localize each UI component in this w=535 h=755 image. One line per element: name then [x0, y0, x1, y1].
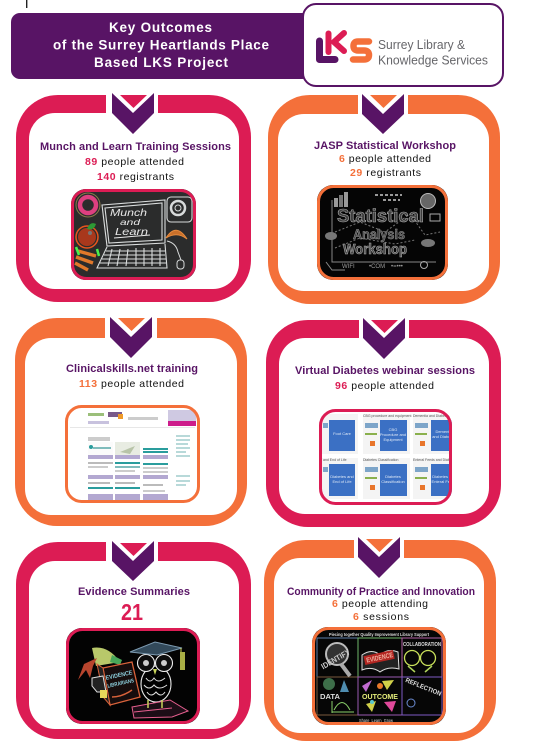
image: statistical workshop chalkboard: [317, 185, 448, 280]
image: statistical workshop chalkboard: •COM: [369, 264, 385, 270]
image: webinar tile grid: Equipment: [383, 437, 403, 442]
title: Key Outcomes: [109, 20, 212, 35]
image: statistical workshop chalkboard: WIFI: [342, 264, 355, 270]
icon: chevron: [112, 541, 154, 581]
logo panel: [303, 4, 503, 86]
heading: Evidence Summaries: [78, 586, 190, 598]
image: webinar tile grid: and End of Life: [323, 458, 347, 462]
image: webinar tile grid: End of Life: [332, 479, 352, 484]
attendance: 96 people attended: [335, 380, 434, 392]
image: statistical workshop chalkboard: Analysis: [353, 226, 405, 242]
image: community of practice chalk puzzle: IDENTIFY: [320, 647, 352, 671]
image: webinar tile grid: Enteral Feeds and Diabetes: [413, 458, 457, 462]
heading: JASP Statistical Workshop: [314, 140, 456, 152]
image: munch and learn chalkboard: Munch: [110, 208, 148, 219]
image: statistical workshop chalkboard: •=•••: [391, 264, 403, 270]
header banner: [11, 13, 311, 79]
panel: Munch and Learn: [16, 90, 251, 302]
image: webinar tile grid: Procedure and: [380, 432, 406, 437]
image: evidence librarians owl chalkboard: LIBRARIANS: [107, 678, 135, 690]
logo text: [378, 38, 488, 68]
image: munch and learn chalkboard: Learn: [115, 227, 149, 238]
image: community of practice chalk puzzle: COLLABORATION: [403, 642, 441, 648]
image: munch and learn chalkboard: and: [120, 218, 141, 227]
laptop: [97, 200, 167, 268]
registrants: 29 registrants: [350, 167, 421, 179]
image: webinar tile grid: and Diabetes: [432, 434, 456, 439]
attendance: 89 people attended: [85, 156, 184, 168]
image: webinar tile grid: Diabetes: [385, 474, 401, 479]
image: webinar tile grid: Dementia: [435, 429, 453, 434]
attendance: 6 people attended: [339, 153, 431, 165]
logo text: Surrey Library &: [378, 38, 466, 52]
image: webinar tile grid: CBG procedure and equipment: [363, 414, 411, 418]
image: community of practice chalk puzzle: OUTCOME: [362, 694, 398, 701]
panel: Community of Practice and Innovation: [264, 533, 496, 741]
icon: chevron: [112, 93, 154, 134]
image: webinar tile grid: Diabetes Classification: [363, 458, 398, 462]
image: webinar tile grid: Dementia and Diabetes: [413, 414, 450, 418]
image: webinar tile grid: Enteral Feeds: [432, 479, 456, 484]
icon: chevron: [362, 94, 404, 134]
image: webinar tile grid: CBG: [389, 427, 397, 432]
image: statistical workshop chalkboard: Workshop: [343, 241, 407, 258]
image: munch and learn chalkboard: [71, 189, 196, 280]
heading: Munch and Learn Training Sessions: [40, 141, 231, 153]
image: community of practice chalk puzzle: Share_Learn_Grow: [359, 718, 394, 723]
registrants: 140 registrants: [97, 171, 174, 183]
icon: chevron: [363, 318, 405, 359]
image: webinar tile grid: [319, 409, 452, 505]
image: evidence librarians owl chalkboard: [66, 628, 200, 724]
image: community of practice chalk puzzle: REFLECTION: [404, 677, 442, 698]
count: 21: [121, 599, 143, 625]
icon: LKS logo mark: [320, 33, 369, 60]
icon: chevron: [358, 537, 400, 578]
title: of the Surrey Heartlands Place: [53, 38, 269, 52]
title: Based LKS Project: [94, 55, 228, 70]
title: [53, 20, 269, 70]
image: clinicalskills dashboard screenshot: [65, 405, 200, 503]
image: community of practice chalk puzzle: Piecing together Quality Improvement Library Support: [329, 632, 429, 637]
heading: Virtual Diabetes webinar sessions: [295, 365, 475, 377]
image: webinar tile grid: Classification: [381, 479, 405, 484]
image: webinar tile grid: Foot Care: [333, 431, 352, 436]
doodles: [80, 197, 96, 213]
logo text: Knowledge Services: [378, 54, 488, 68]
panel: JASP Statistical Workshop: [268, 90, 500, 304]
icon: chevron: [110, 317, 152, 358]
heading: Clinicalskills.net training: [66, 363, 198, 375]
image: community of practice chalk puzzle: [312, 627, 446, 725]
attendance: 6 people attending: [332, 598, 428, 610]
image: webinar tile grid: Diabetes and: [330, 474, 354, 479]
attendance: 113 people attended: [79, 378, 184, 390]
panel: Clinicalskills.net training: [15, 314, 247, 526]
panel: Evidence Summaries: [16, 536, 251, 739]
heading: Community of Practice and Innovation: [287, 586, 475, 598]
image: community of practice chalk puzzle: DATA: [320, 694, 340, 701]
image: community of practice chalk puzzle: EVIDENCE: [366, 652, 394, 665]
sessions: 6 sessions: [353, 611, 409, 623]
panel: Virtual Diabetes webinar sessions: [266, 314, 501, 527]
image: statistical workshop chalkboard: Statistical: [337, 206, 424, 226]
image: webinar tile grid: Diabetes and: [432, 474, 456, 479]
image: evidence librarians owl chalkboard: EVIDENCE: [105, 670, 133, 682]
